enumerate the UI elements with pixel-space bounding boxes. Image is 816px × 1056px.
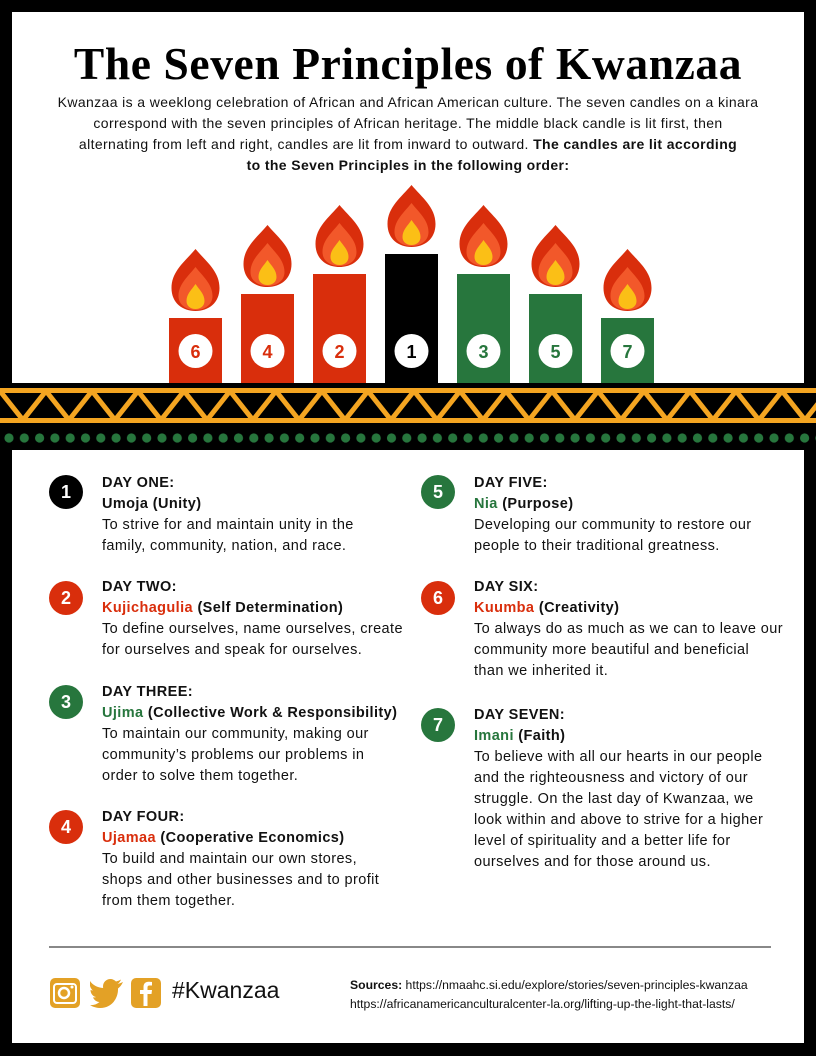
- day 2: Kujichagulia (Self Determination): [102, 600, 343, 616]
- day 5: DAY FIVE:: [474, 475, 548, 491]
- day 7: look within and above to strive for a higher: [474, 812, 763, 828]
- day 7: DAY SEVEN:: [474, 707, 565, 723]
- sources: https://africanamericanculturalcenter-la.org/lifting-up-the-light-that-lasts/: [350, 997, 735, 1011]
- kinara candles: [169, 185, 654, 383]
- candle 7: 7: [622, 342, 633, 362]
- text: 4: [61, 817, 71, 837]
- title: The Seven Principles of Kwanzaa: [74, 38, 742, 89]
- day 5: people to their traditional greatness.: [474, 538, 720, 554]
- day 1: Umoja (Unity): [102, 496, 201, 512]
- day 7: level of spirituality and a better life for: [474, 833, 731, 849]
- day 3: To maintain our community, making our: [102, 726, 369, 742]
- day 7: [421, 707, 763, 870]
- day 7: and the righteousness and victory of our: [474, 770, 748, 786]
- icon: instagram: [50, 978, 80, 1008]
- day 3: order to solve them together.: [102, 768, 298, 784]
- day 5: Nia (Purpose): [474, 496, 573, 512]
- candle 4: [241, 225, 294, 383]
- day 2: [49, 579, 403, 658]
- day 3: Ujima (Collective Work & Responsibility): [102, 705, 397, 721]
- candle 1: 1: [406, 342, 417, 362]
- hashtag: #Kwanzaa: [172, 977, 279, 1003]
- day 1: [49, 475, 354, 554]
- day 5: Developing our community to restore our: [474, 517, 752, 533]
- day 2: DAY TWO:: [102, 579, 177, 595]
- text: 3: [61, 692, 71, 712]
- intro text: [58, 94, 758, 173]
- sources: Sources: https://nmaahc.si.edu/explore/stories/seven-principles-kwanzaa: [350, 978, 748, 992]
- candle 3: 3: [478, 342, 489, 362]
- intro text: correspond with the seven principles of African heritage. The middle black candle is lit first, then: [93, 115, 723, 131]
- candle 7: [601, 249, 654, 383]
- divider: [49, 946, 771, 948]
- candle 2: [313, 205, 366, 383]
- text: 2: [61, 588, 71, 608]
- candle 5: 5: [550, 342, 561, 362]
- candle 5: [529, 225, 582, 383]
- day 3: [49, 684, 397, 784]
- day 1: family, community, nation, and race.: [102, 538, 346, 554]
- text: 7: [433, 715, 443, 735]
- day 6: than we inherited it.: [474, 663, 608, 679]
- day 3: DAY THREE:: [102, 684, 193, 700]
- day 4: [49, 809, 379, 909]
- day 4: Ujamaa (Cooperative Economics): [102, 830, 344, 846]
- day 7: Imani (Faith): [474, 728, 565, 744]
- candle 6: [169, 249, 222, 383]
- candle 3: [457, 205, 510, 383]
- candle 1: [385, 185, 438, 383]
- social icons and hashtag: [50, 977, 280, 1008]
- candle 6: 6: [190, 342, 201, 362]
- day 4: shops and other businesses and to profit: [102, 872, 379, 888]
- day 6: community more beautiful and beneficial: [474, 642, 749, 658]
- candle 4: 4: [262, 342, 273, 362]
- intro text: to the Seven Principles in the following order:: [247, 157, 569, 173]
- sources: [350, 978, 748, 1011]
- day 2: To define ourselves, name ourselves, create: [102, 621, 403, 637]
- day 6: [421, 579, 783, 679]
- text: 6: [433, 588, 443, 608]
- icon: facebook: [131, 978, 161, 1008]
- day 7: ourselves and for those around us.: [474, 854, 711, 870]
- day 7: struggle. On the last day of Kwanzaa, we: [474, 791, 754, 807]
- day 3: community’s problems our problems in: [102, 747, 364, 763]
- day 4: DAY FOUR:: [102, 809, 185, 825]
- day 6: Kuumba (Creativity): [474, 600, 619, 616]
- day 1: To strive for and maintain unity in the: [102, 517, 354, 533]
- panel: top: [12, 12, 804, 383]
- intro text: Kwanzaa is a weeklong celebration of African and African American culture. The seven candles on a kinara: [58, 94, 758, 110]
- panel: principles: [12, 450, 804, 1043]
- day 2: for ourselves and speak for ourselves.: [102, 642, 362, 658]
- icon: twitter: [90, 979, 123, 1008]
- intro text: alternating from left and right, candles are lit from inward to outward. The candles are lit according: [79, 136, 737, 152]
- decorative band: [0, 388, 816, 443]
- day 7: To believe with all our hearts in our people: [474, 749, 762, 765]
- day 6: DAY SIX:: [474, 579, 538, 595]
- day 4: from them together.: [102, 893, 235, 909]
- text: 1: [61, 482, 71, 502]
- text: 5: [433, 482, 443, 502]
- day 4: To build and maintain our own stores,: [102, 851, 357, 867]
- day 6: To always do as much as we can to leave our: [474, 621, 783, 637]
- candle 2: 2: [334, 342, 345, 362]
- day 1: DAY ONE:: [102, 475, 174, 491]
- day 5: [421, 475, 752, 554]
